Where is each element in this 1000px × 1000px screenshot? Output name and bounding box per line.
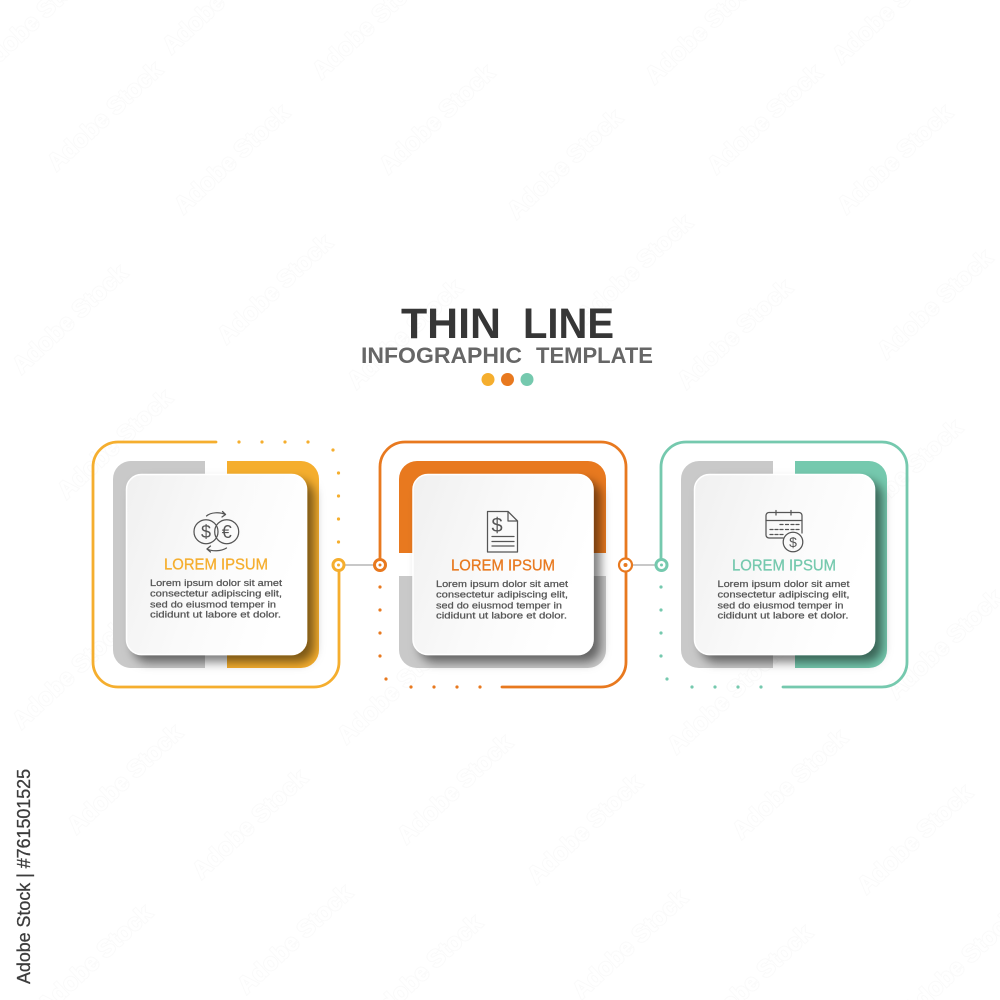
icon: invoice document [488,512,518,552]
watermark: Adobe Stock [232,879,358,999]
card: step 2 [413,474,593,654]
body text: step 2: sed do eiusmod temper in [436,600,562,612]
watermark: Adobe Stock [572,209,698,329]
subtitle [361,343,653,368]
dotted path: step 2 [378,585,482,689]
subtitle: INFOGRAPHIC [361,343,522,368]
watermark: Adobe Stock [702,59,828,179]
watermark: Adobe Stock [522,769,648,889]
icon: currency exchange [194,512,239,552]
icon: currency exchange: € [222,522,232,542]
panel: step 1 [93,440,344,687]
backing: grey part [113,461,205,668]
body text: step 2 [436,579,568,622]
watermark: Adobe Stock [187,764,313,884]
watermark: Adobe Stock [212,229,338,349]
watermark: Adobe Stock [342,274,468,394]
watermark: Adobe Stock [332,629,458,749]
body text: step 3: cididunt ut labore et dolor. [718,610,848,622]
heading: step 2: LOREM IPSUM [451,558,555,574]
backing: colour part [795,461,887,668]
body text: step 1: cididunt ut labore et dolor. [150,610,281,620]
body text: step 1: Lorem ipsum dolor sit amet [150,578,282,589]
watermark: Adobe Stock [52,384,178,504]
node: step 2 right [619,558,632,572]
subtitle: TEMPLATE [536,343,653,368]
body text: step 1: consectetur adipiscing elit, [150,588,282,600]
body text: step 2: Lorem ipsum dolor sit amet [436,579,568,590]
body text: step 3: consectetur adipiscing elit, [718,590,850,600]
watermark: Adobe Stock [374,59,500,179]
title [401,300,614,348]
watermark: Adobe Stock [502,104,628,224]
watermark: Adobe Stock [872,244,998,364]
body text: step 3 [718,579,850,622]
connector: panel 1 to panel 2 [345,564,374,566]
watermark: Adobe Stock [727,724,853,844]
watermark: Adobe Stock [842,414,968,534]
watermark: Adobe Stock [832,99,958,219]
outline: step 2 [380,442,626,687]
body text: step 3: Lorem ipsum dolor sit amet [718,579,850,590]
backing: grey part [399,576,606,668]
outline: step 3 [661,442,907,687]
watermark: Adobe Stock [392,729,518,849]
node: step 2 left [374,560,386,570]
title: THIN [401,300,501,348]
heading: step 3: LOREM IPSUM [732,558,836,574]
icon: invoice document: $ [491,515,503,537]
body text: step 2: consectetur adipiscing elit, [436,590,568,600]
watermark: Adobe Stock [672,274,798,394]
icon: calendar with coin: $ [789,534,797,550]
node: step 1 [333,560,344,570]
body text: step 1 [150,578,282,620]
backing: colour part [399,461,606,553]
title dots [482,373,534,386]
watermark: Adobe Stock [42,56,168,176]
dotted path: step 3 [659,585,763,689]
stock id caption: Adobe Stock | #761501525 [14,769,34,984]
body text: step 1: sed do eiusmod temper in [150,600,276,610]
icon: currency exchange: $ [201,522,211,542]
watermark: Adobe Stock [852,779,978,899]
backing: colour part [227,461,319,668]
node: step 3 [656,560,667,570]
title: LINE [523,300,614,348]
dotted path: step 1 [237,440,340,544]
watermark: Adobe Stock [7,614,133,734]
panel: step 3 [656,442,907,689]
watermark: Adobe Stock [62,719,188,839]
watermark: Adobe Stock [169,99,295,219]
heading: step 1: LOREM IPSUM [164,556,268,574]
backing: grey part [681,461,773,668]
card: step 3 [694,474,874,654]
card: step 1 [126,474,306,654]
connector: panel 2 to panel 3 [632,564,655,566]
icon: calendar with coin [766,510,803,552]
panel: step 2 [374,442,632,689]
outline: step 1 [93,442,339,687]
watermark: Adobe Stock [7,259,133,379]
body text: step 2: cididunt ut labore et dolor. [436,610,567,622]
watermark: Adobe Stock [662,639,788,759]
body text: step 3: sed do eiusmod temper in [718,600,844,612]
